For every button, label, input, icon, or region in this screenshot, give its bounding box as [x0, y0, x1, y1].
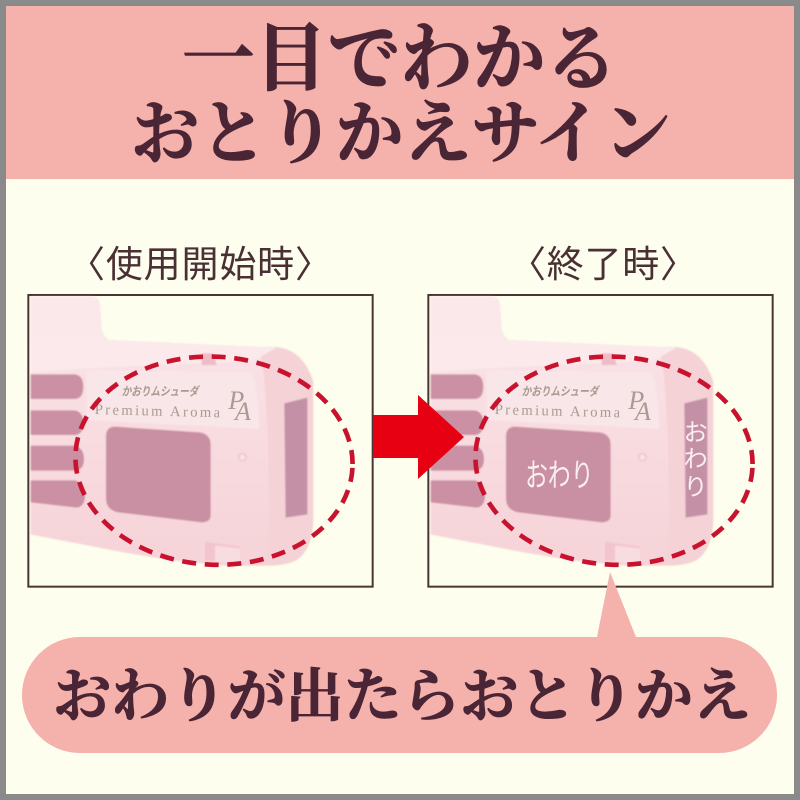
dashed highlight circle: [70, 350, 358, 572]
arrow: [373, 395, 464, 479]
title line 1: 一目でわかる: [182, 19, 618, 101]
product name print: かおりムシューダ: [522, 385, 600, 399]
label: at start of use: 〈使用開始時〉: [68, 244, 332, 285]
PA monogram: A: [233, 397, 251, 426]
product subtitle print: Premium Aroma: [95, 402, 221, 421]
PA monogram: P: [627, 386, 644, 415]
PA monogram: [627, 386, 651, 426]
callout bubble: [22, 572, 777, 753]
product subtitle print: Premium Aroma: [495, 402, 621, 421]
panel: end of use: [428, 295, 773, 587]
label: at end of use: 〈終了時〉: [509, 244, 697, 285]
owari sign side: り: [684, 474, 708, 501]
owari sign front: おわり: [525, 457, 593, 493]
product name print: かおりムシューダ: [122, 385, 200, 399]
header band: [6, 6, 794, 179]
PA monogram: A: [633, 397, 651, 426]
PA monogram: P: [227, 386, 244, 415]
owari sign side: [684, 419, 708, 501]
PA monogram: [227, 386, 251, 426]
dashed highlight circle: [470, 350, 758, 572]
owari sign side: わ: [684, 446, 708, 473]
panel: start of use: [28, 295, 373, 587]
title line 2: おとりかえサイン: [131, 96, 671, 172]
owari sign side: お: [684, 419, 708, 446]
callout text: おわりが出たらおとりかえ: [53, 664, 751, 729]
